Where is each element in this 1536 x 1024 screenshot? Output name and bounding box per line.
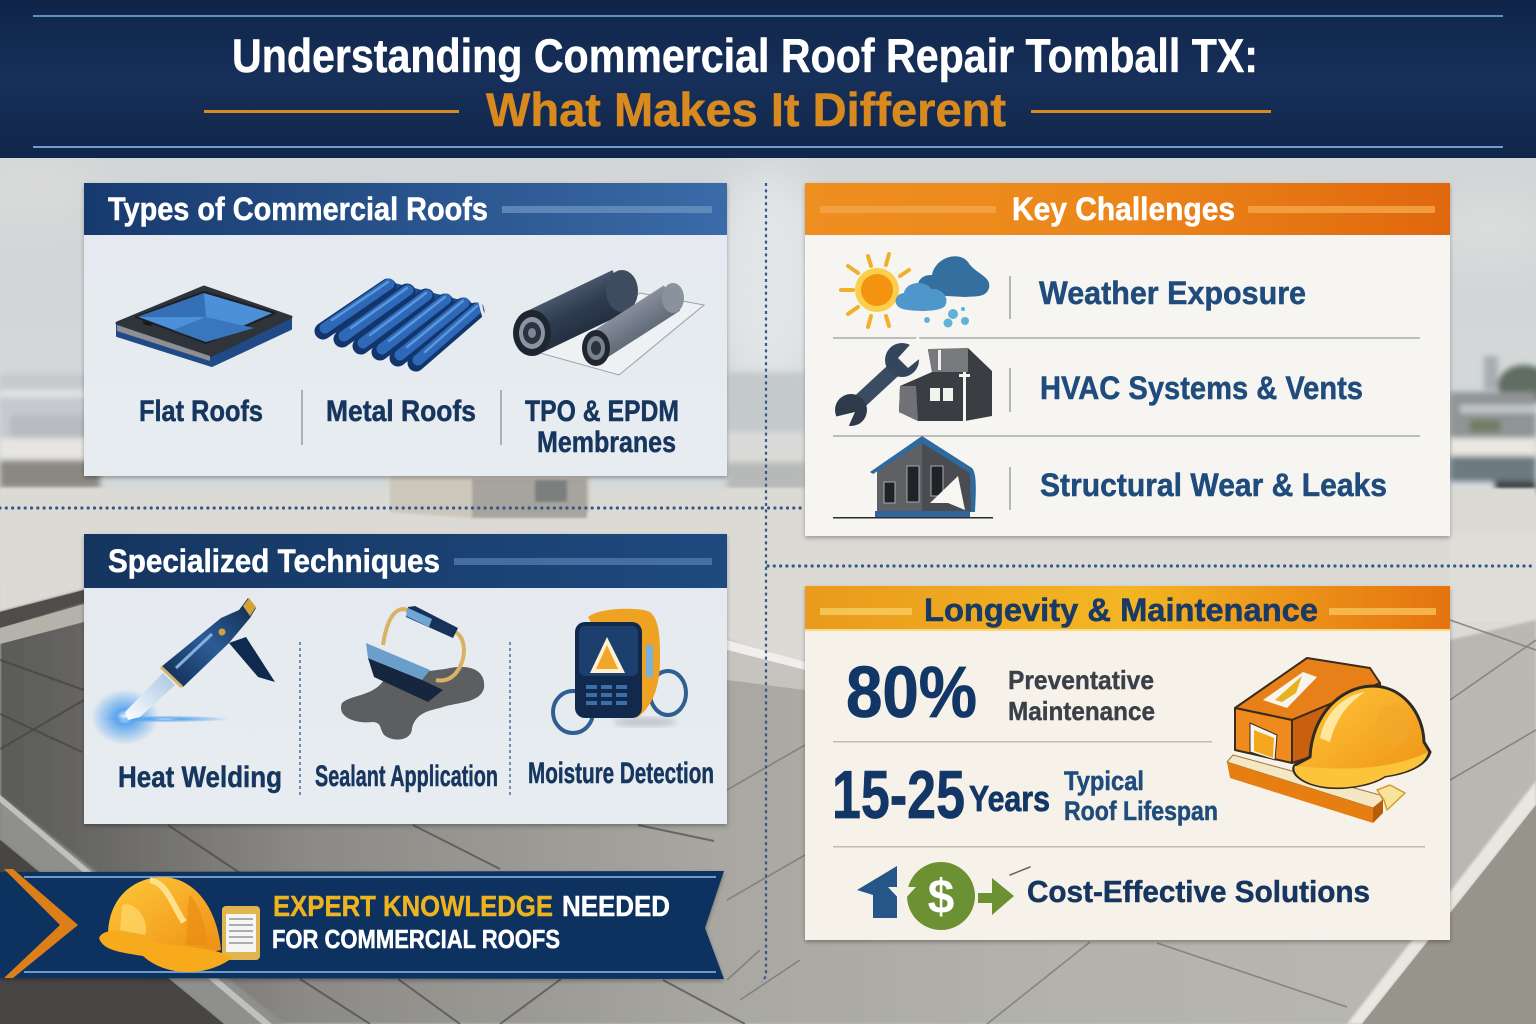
- label: moisture detection: Moisture Detection: [528, 757, 714, 790]
- label: metal roofs: Metal Roofs: [326, 395, 476, 428]
- icon: wrench and HVAC building: [830, 336, 992, 432]
- panel: types of commercial roofs: [84, 183, 727, 476]
- label: preventative maintenance: [1008, 665, 1155, 726]
- label: TPO and EPDM membranes: TPO & EPDM: [525, 395, 679, 428]
- banner text: EXPERT KNOWLEDGE: [273, 891, 553, 923]
- banner text: [272, 891, 670, 954]
- label: sealant application: Sealant Application: [315, 760, 498, 793]
- label: typical roof lifespan: [1064, 766, 1218, 826]
- icon: flat roof: [117, 287, 291, 366]
- heading: longevity and maintenance: Longevity & Maintenance: [924, 592, 1318, 628]
- stat: 15-25 years: 15-25: [832, 757, 965, 833]
- label: TPO and EPDM membranes: Membranes: [537, 426, 676, 459]
- label: cost-effective solutions: Cost-Effective Solutions: [1027, 874, 1370, 909]
- label: preventative maintenance: Maintenance: [1008, 696, 1155, 726]
- icon: hard hat: [99, 877, 232, 972]
- header band: [0, 0, 1536, 158]
- subtitle: What Makes It Different: [486, 83, 1006, 136]
- label: structural wear and leaks: Structural Wear & Leaks: [1040, 467, 1387, 503]
- stat: 15-25 years: Years: [969, 778, 1050, 819]
- chevron: [4, 869, 78, 978]
- label: HVAC systems and vents: HVAC Systems & Vents: [1040, 370, 1363, 406]
- icon: membrane rolls: [513, 270, 704, 375]
- icon: metal roof: [320, 281, 484, 366]
- icon: sealant application: [341, 606, 484, 740]
- banner text: NEEDED: [562, 891, 670, 923]
- upper light roof deck: [0, 488, 1536, 678]
- icon: cost-effective savings: [857, 862, 1030, 930]
- HVAC unit: [390, 476, 590, 518]
- icon: weather: [841, 254, 989, 328]
- label: flat roofs: Flat Roofs: [139, 395, 263, 428]
- label: weather exposure: Weather Exposure: [1039, 275, 1306, 311]
- label: heat welding: Heat Welding: [118, 761, 282, 794]
- icon: clipboard: [222, 906, 260, 960]
- label: TPO and EPDM membranes: [525, 395, 679, 459]
- banner text: FOR COMMERCIAL ROOFS: [272, 924, 560, 954]
- dollar sign: $: [928, 871, 955, 924]
- banner: expert knowledge needed: [0, 869, 724, 979]
- far buildings: [0, 356, 1536, 532]
- panel: longevity and maintenance: [805, 586, 1450, 940]
- heading: key challenges: Key Challenges: [1012, 191, 1235, 227]
- label: preventative maintenance: Preventative: [1008, 665, 1154, 695]
- dotted separator: [299, 642, 301, 796]
- label: typical roof lifespan: Typical: [1064, 766, 1144, 796]
- icon: heat welding gun: [91, 598, 275, 745]
- bright edge strip, lower right: [1347, 781, 1536, 1024]
- icon: moisture detector: [553, 609, 686, 733]
- title: Understanding Commercial Roof Repair Tomball TX:: [232, 29, 1258, 82]
- panel: specialized techniques: [84, 534, 727, 824]
- label: typical roof lifespan: Roof Lifespan: [1064, 796, 1218, 826]
- icon: damaged house: [833, 436, 993, 518]
- panel: key challenges: [805, 183, 1450, 536]
- lower roof surface: [0, 590, 1536, 1024]
- dotted section dividers: [0, 183, 1536, 982]
- stat: 80 percent: 80%: [846, 653, 977, 733]
- dotted separator: [509, 642, 511, 796]
- icon: building and hard hat: [1227, 658, 1430, 823]
- heading: specialized techniques: Specialized Techniques: [108, 543, 440, 579]
- heading: types of commercial roofs: Types of Commercial Roofs: [108, 191, 488, 227]
